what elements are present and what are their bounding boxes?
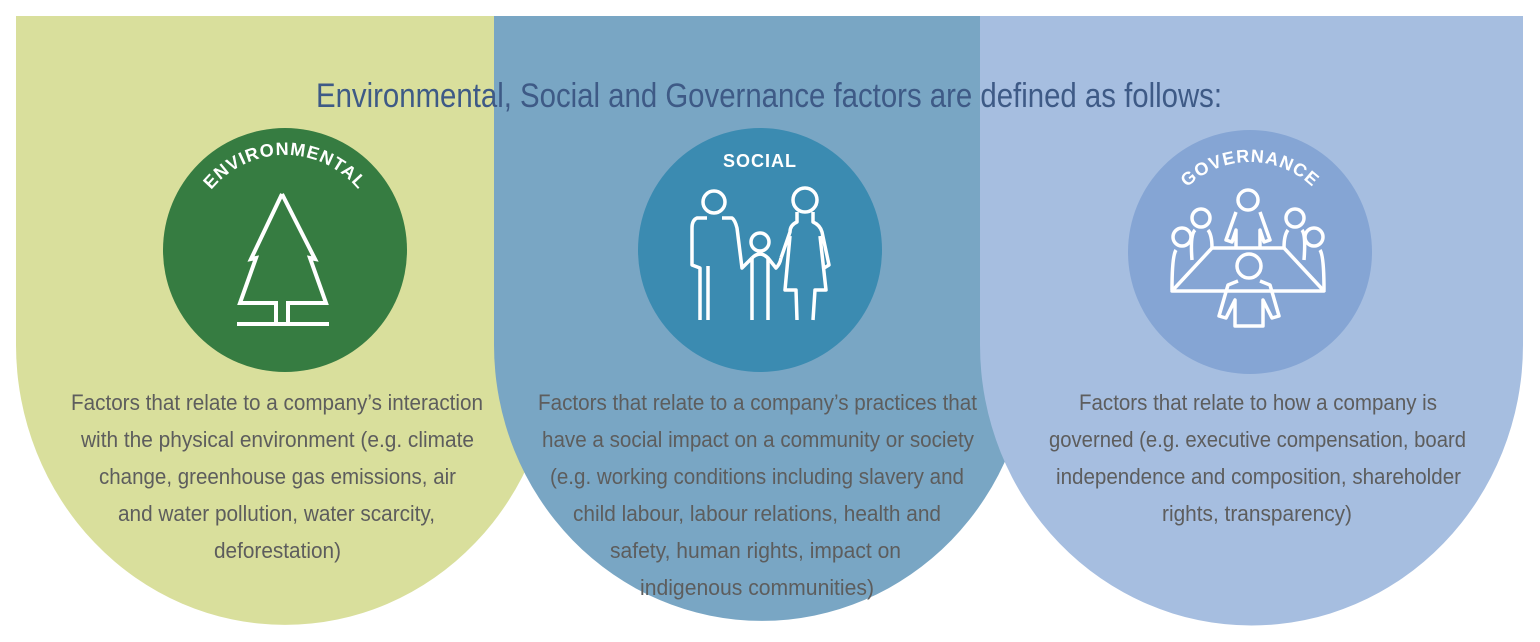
text: environmental description [71, 390, 483, 563]
text: social description: have a social impact on a community or society [542, 427, 974, 452]
text: environmental description: with the physical environment (e.g. climate [80, 427, 474, 452]
text: environmental description: and water pollution, water scarcity, [118, 501, 435, 526]
text: social description: indigenous communities) [640, 575, 874, 600]
text: environmental description: deforestation) [214, 538, 341, 563]
label: social: SOCIAL [723, 151, 797, 171]
panel: governance [980, 16, 1523, 626]
text: social description: safety, human rights, impact on [610, 538, 901, 563]
text: environmental description: change, greenhouse gas emissions, air [99, 464, 456, 489]
text: governance description: independence and composition, shareholder [1056, 464, 1461, 489]
icon: social circle [638, 128, 882, 372]
text: social description [538, 390, 977, 600]
text: environmental description: Factors that relate to a company’s interaction [71, 390, 483, 415]
text: governance description [1049, 390, 1466, 526]
text: governance description: Factors that relate to how a company is [1079, 390, 1437, 415]
label: governance: GOVERNANCE [1182, 150, 1320, 186]
text: social description: (e.g. working conditions including slavery and [550, 464, 964, 489]
panel: environmental [16, 16, 554, 625]
icon: tree [237, 194, 329, 324]
icon: family [692, 188, 829, 320]
text: social description: child labour, labour relations, health and [573, 501, 941, 526]
text: governance description: rights, transparency) [1162, 501, 1352, 526]
text: social description: Factors that relate to a company’s practices that [538, 390, 977, 415]
panel: social [494, 16, 1030, 621]
icon: governance circle [1128, 130, 1372, 374]
icon: environmental circle [163, 128, 407, 372]
text: governance description: governed (e.g. executive compensation, board [1049, 427, 1466, 452]
icon: meeting [1172, 190, 1324, 326]
title: Environmental, Social and Governance factors are defined as follows: [316, 77, 1222, 115]
label: environmental: ENVIRONMENTAL [202, 142, 362, 190]
